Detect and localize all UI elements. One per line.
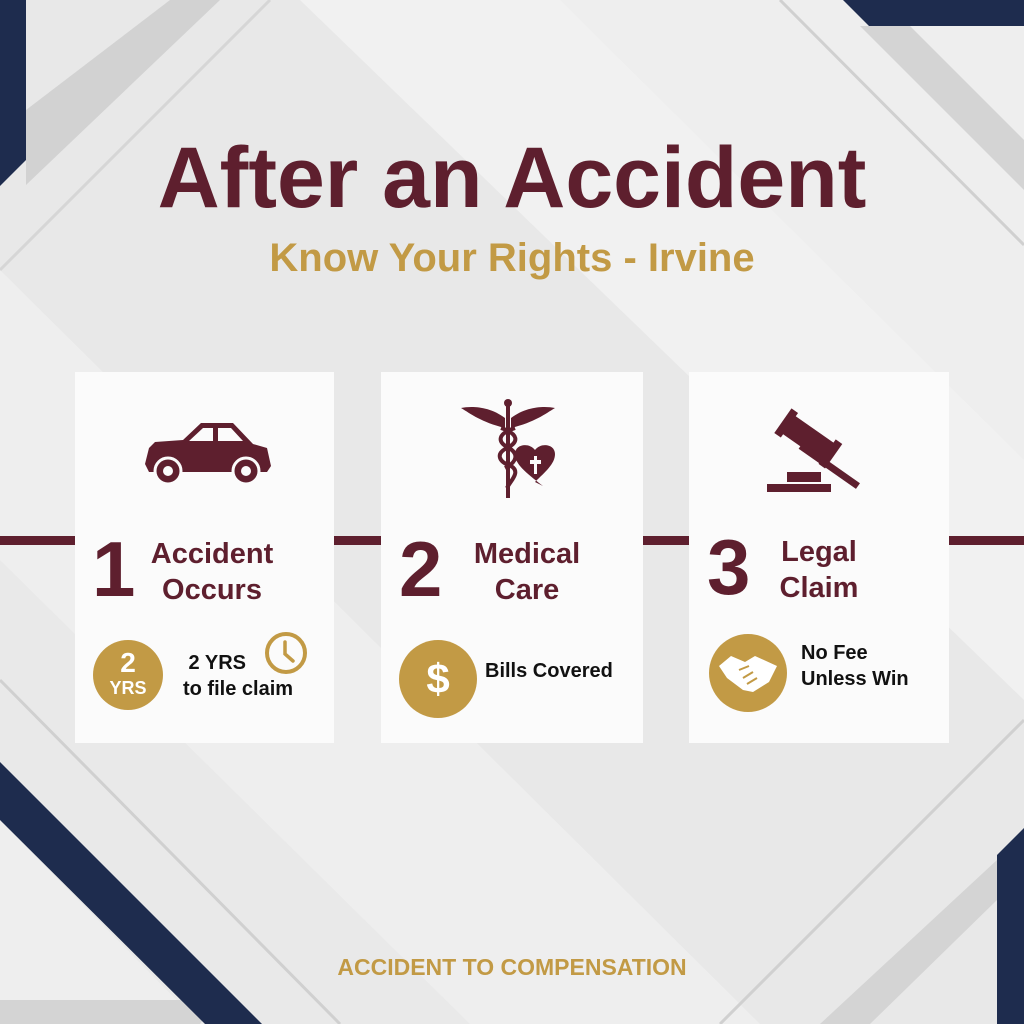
label: Medical xyxy=(474,538,580,570)
panel: step 3 xyxy=(689,372,949,743)
icon: 2 yrs coin: 2 xyxy=(120,647,136,678)
panel: step 1 xyxy=(75,372,334,743)
text: no fee unless win: No Fee xyxy=(801,642,868,664)
text: bills covered: Bills Covered xyxy=(485,660,613,682)
icon: clock xyxy=(265,632,307,674)
label: Occurs xyxy=(162,574,262,606)
panel: step 2 xyxy=(381,372,643,743)
timeline line xyxy=(0,536,1024,545)
icon: 2 yrs coin xyxy=(93,640,163,710)
navy corners xyxy=(0,0,26,186)
label xyxy=(151,538,273,606)
label: Claim xyxy=(780,572,858,604)
icon: gavel xyxy=(767,408,860,492)
icon: car xyxy=(145,423,271,482)
label: Accident xyxy=(151,538,273,570)
title: After an Accident xyxy=(158,130,866,226)
text: 2 yrs to file claim: 2 YRS xyxy=(189,652,246,674)
text: no fee unless win: Unless Win xyxy=(801,668,909,690)
icon: handshake coin xyxy=(709,634,787,712)
icon: dollar coin: $ xyxy=(426,655,450,702)
icon: 2 yrs coin: YRS xyxy=(109,678,146,698)
label: Care xyxy=(495,574,559,606)
text: 2 yrs to file claim: to file claim xyxy=(183,678,293,700)
subtitle: Know Your Rights - Irvine xyxy=(269,236,755,280)
footer: ACCIDENT TO COMPENSATION xyxy=(337,954,687,980)
number 2: 2 xyxy=(399,525,442,613)
text: 2 yrs to file claim xyxy=(183,652,293,700)
icon: caduceus and heart xyxy=(461,399,555,498)
number 1: 1 xyxy=(92,525,135,613)
icon: dollar coin xyxy=(399,640,477,718)
number 3: 3 xyxy=(707,523,750,611)
label: Legal xyxy=(781,536,857,568)
text: no fee unless win xyxy=(801,642,909,690)
label xyxy=(780,536,858,604)
label xyxy=(474,538,580,606)
